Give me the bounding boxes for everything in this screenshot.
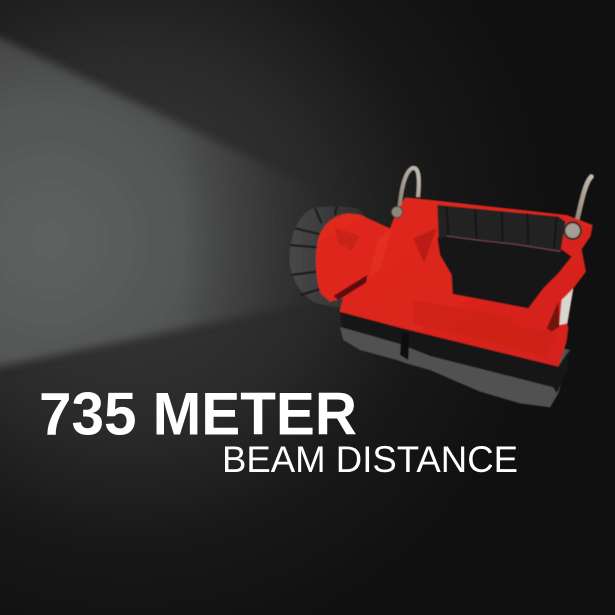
red body [316,197,593,367]
grey lower foot [340,320,570,407]
light beam [0,34,275,370]
right rivet [564,222,581,239]
lens bezel [289,206,367,308]
grip [437,205,565,251]
flashlight product image [289,168,593,407]
base slot [400,332,409,360]
red body shading [333,228,557,357]
side lens window [559,288,573,325]
handle opening [437,235,572,308]
headline: 735 METER: 735 METER [39,380,357,448]
subheading: BEAM DISTANCE: BEAM DISTANCE [222,438,518,480]
left rivet [391,206,403,218]
right metal ring [575,177,591,228]
left metal ring [399,168,419,210]
black base band [340,310,569,393]
